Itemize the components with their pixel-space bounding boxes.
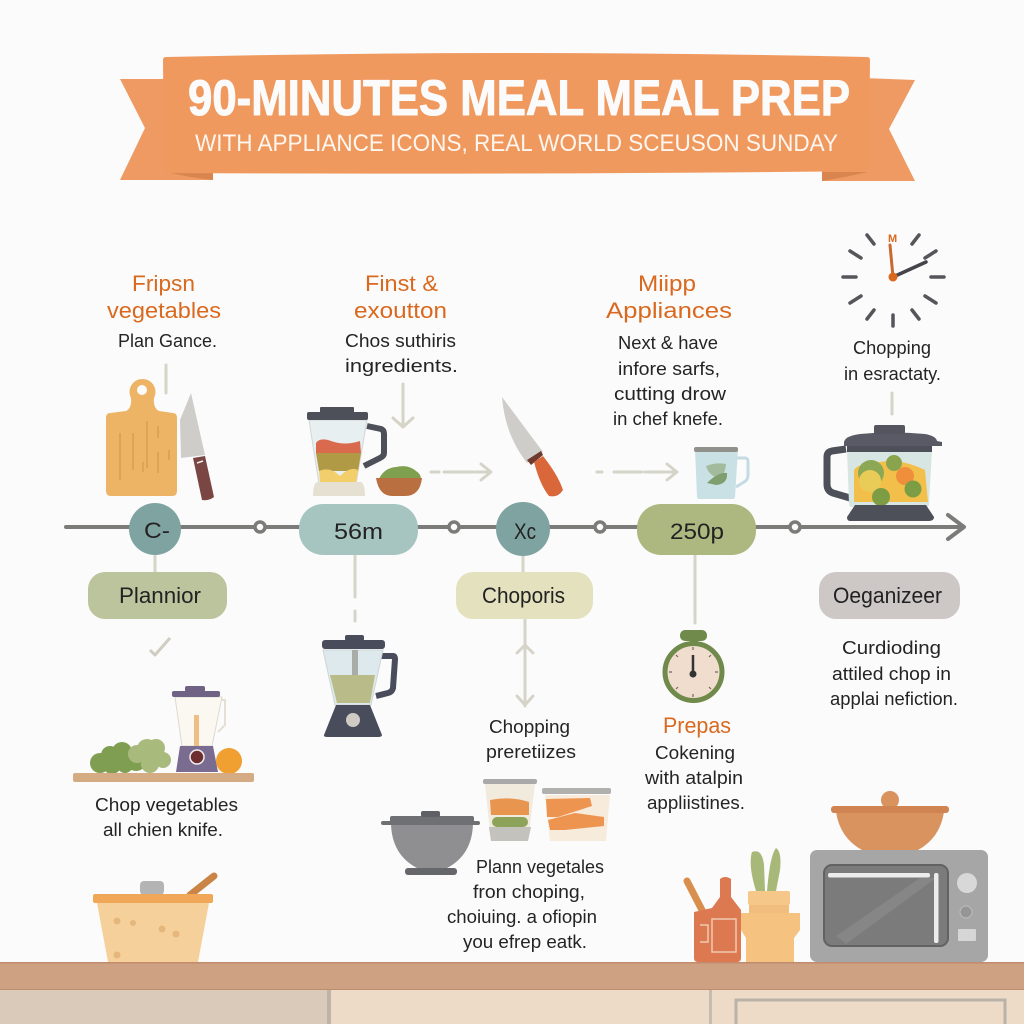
text block: Miipp Appliances: Next & have bbox=[618, 332, 718, 353]
connectors and arrows bbox=[150, 365, 892, 706]
text block: Chopping in esractaty bbox=[844, 337, 941, 384]
title banner bbox=[120, 53, 915, 181]
title text: 90-MINUTES MEAL MEAL PREP bbox=[188, 70, 850, 126]
icon: bottle and brush bbox=[687, 877, 741, 962]
icon: mug bbox=[694, 447, 748, 499]
subtitle: WITH APPLIANCE ICONS, REAL WORLD SCEUSON SUNDAY bbox=[195, 130, 838, 157]
step node: Xc: Xc bbox=[514, 519, 536, 544]
text block: Curdioding: Curdioding bbox=[842, 637, 941, 658]
icon: microwave bbox=[810, 850, 988, 966]
text block: Chopping in esractaty: Chopping bbox=[853, 337, 931, 358]
text block: Fripsn vegetables bbox=[107, 271, 221, 351]
text block: Miipp Appliances: cutting drow bbox=[614, 383, 727, 404]
icon: potted plant bbox=[741, 848, 800, 962]
text block: Chop vegetables bbox=[95, 794, 238, 840]
text block: Chopping preretiizes: preretiizes bbox=[486, 741, 576, 762]
text block: Plann vegetales: you efrep eatk. bbox=[463, 931, 587, 952]
label pill: Oeganizeer: Oeganizeer bbox=[833, 583, 942, 608]
icon: meal prep containers bbox=[483, 779, 611, 841]
text block: Finst & exoutton bbox=[345, 271, 458, 376]
icon: wall clock: M bbox=[888, 233, 897, 245]
label pill: Oeganizeer bbox=[819, 572, 960, 619]
text block: Finst & exoutton: Finst & bbox=[365, 271, 438, 296]
icon: top blender with ingredients bbox=[307, 407, 422, 496]
text block: Chop vegetables: all chien knife. bbox=[103, 819, 223, 840]
text block: Chopping in esractaty: in esractaty. bbox=[844, 363, 941, 384]
text block: Plann vegetales: fron choping, bbox=[473, 881, 585, 902]
step node: C-: C- bbox=[144, 518, 170, 543]
text block: Miipp Appliances: infore sarfs, bbox=[618, 358, 720, 379]
text block: Fripsn vegetables: Plan Gance. bbox=[118, 330, 217, 351]
text block: Prepas: Cokening bbox=[655, 742, 735, 763]
text block: Plann vegetales bbox=[447, 856, 604, 952]
text block: Chopping preretiizes bbox=[486, 716, 576, 762]
icon: cutting board bbox=[106, 379, 177, 496]
icon: stock pot bbox=[381, 811, 480, 875]
text block: Curdioding: attiled chop in bbox=[832, 663, 951, 684]
text block: Prepas: with atalpin bbox=[644, 767, 743, 788]
step node: 56m: 56m bbox=[334, 519, 383, 544]
text block: Finst & exoutton: exoutton bbox=[354, 298, 447, 323]
text block: Miipp Appliances: Appliances bbox=[606, 298, 732, 323]
icon: food processor bbox=[827, 425, 942, 521]
icon: bowl on microwave bbox=[831, 791, 949, 850]
text block: Curdioding: applai nefiction. bbox=[830, 688, 958, 709]
text block: Finst & exoutton: Chos suthiris bbox=[345, 330, 456, 351]
icon: basket on counter bbox=[93, 876, 214, 962]
step node: 250p: 250p bbox=[670, 519, 724, 544]
icon: chef knife left bbox=[180, 393, 214, 500]
step node: C- bbox=[129, 503, 181, 555]
text block: Prepas: Prepas bbox=[663, 713, 731, 738]
text block: Chopping preretiizes: Chopping bbox=[489, 716, 570, 737]
label pill: Plannior bbox=[88, 572, 227, 619]
icon: wall clock bbox=[843, 233, 944, 326]
text block: Fripsn vegetables: vegetables bbox=[107, 298, 221, 323]
step node: Xc bbox=[496, 502, 550, 556]
text block: Fripsn vegetables: Fripsn bbox=[132, 271, 195, 296]
text block: Miipp Appliances bbox=[606, 271, 732, 429]
kitchen counter and cabinets bbox=[0, 962, 1024, 1024]
text block: Miipp Appliances: Miipp bbox=[638, 271, 696, 296]
label pill: Choporis: Choporis bbox=[482, 583, 565, 608]
step node: 250p bbox=[637, 504, 756, 555]
text block: Prepas bbox=[644, 713, 745, 813]
text block: Plann vegetales: Plann vegetales bbox=[476, 856, 604, 877]
text block: Finst & exoutton: ingredients. bbox=[345, 355, 458, 376]
text block: Prepas: appliistines. bbox=[647, 792, 745, 813]
step node: 56m bbox=[299, 504, 418, 555]
icon: dark blender bbox=[322, 635, 395, 737]
icon: chef knife centre bbox=[502, 397, 563, 496]
text block: Chop vegetables: Chop vegetables bbox=[95, 794, 238, 815]
icon: stopwatch bbox=[665, 630, 722, 700]
label pill: Plannior: Plannior bbox=[119, 583, 201, 608]
icon: purple blender with vegetables on shelf bbox=[73, 686, 254, 782]
text block: Curdioding bbox=[830, 637, 958, 709]
label pill: Choporis bbox=[456, 572, 593, 619]
timeline axis bbox=[66, 515, 964, 539]
text block: Plann vegetales: choiuing. a ofiopin bbox=[447, 906, 597, 927]
text block: Miipp Appliances: in chef knefe. bbox=[613, 408, 723, 429]
